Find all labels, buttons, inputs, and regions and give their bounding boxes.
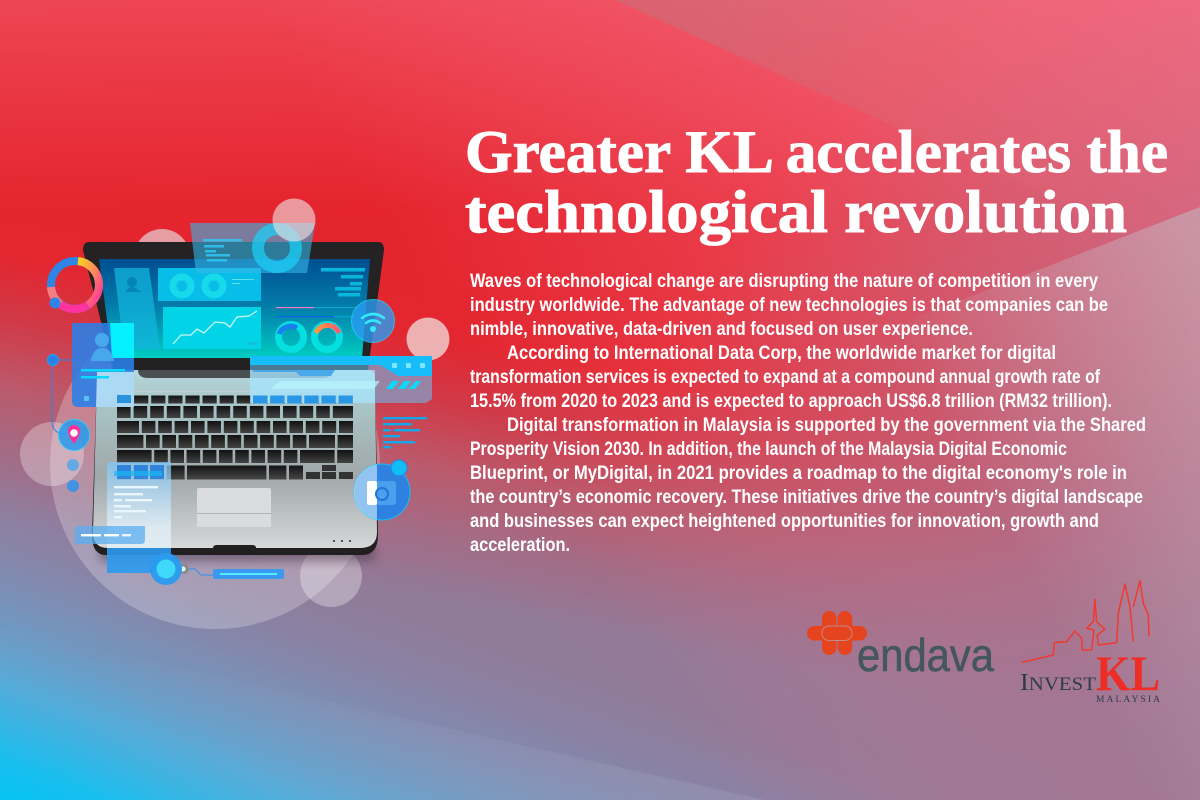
body text: According to International Data Corp, the worldwide market for digital bbox=[507, 343, 1056, 364]
status dots bbox=[333, 540, 351, 542]
title: Greater KL accelerates the bbox=[465, 119, 1168, 185]
left profile panel bbox=[72, 323, 134, 407]
translucent bubble bbox=[272, 198, 316, 242]
progress bar card bbox=[75, 526, 145, 544]
body text: 15.5% from 2020 to 2023 and is expected to approach US$6.8 trillion (RM32 trillion). bbox=[470, 391, 1112, 412]
body text: Prosperity Vision 2030. In addition, the launch of the Malaysia Digital Economic bbox=[470, 439, 1067, 460]
logo: InvestKL Malaysia: INVEST bbox=[1020, 670, 1096, 696]
top floating panel with ring bbox=[190, 223, 315, 273]
laptop base bbox=[92, 370, 378, 555]
logo: InvestKL Malaysia: KL bbox=[1096, 645, 1160, 701]
logo: endava bbox=[807, 611, 994, 681]
illustration: laptop with floating data panels bbox=[20, 198, 450, 629]
laptop hinge bbox=[113, 358, 362, 375]
screen dashboard bbox=[114, 268, 365, 350]
body text: and businesses can expect heightened opportunities for innovation, growth and bbox=[470, 511, 1099, 532]
touchpad bbox=[197, 488, 271, 527]
right status panel bbox=[250, 356, 432, 403]
body text bbox=[470, 271, 1146, 556]
body text: industry worldwide. The advantage of new technologies is that companies can be bbox=[470, 295, 1108, 316]
title: technological revolution bbox=[465, 179, 1127, 245]
keyboard bbox=[117, 400, 353, 479]
logo: InvestKL Malaysia bbox=[1020, 581, 1160, 705]
body text: Blueprint, or MyDigital, in 2021 provides a roadmap to the digital economy's role in bbox=[470, 463, 1127, 484]
location connector and pin bbox=[48, 354, 90, 492]
body text: nimble, innovative, data-driven and focused on user experience. bbox=[470, 319, 973, 340]
donut chart bbox=[50, 261, 99, 309]
backdrop circles bbox=[20, 229, 450, 629]
bottom node and bar bbox=[150, 553, 284, 585]
camera bubble bbox=[354, 460, 410, 520]
logo: endava: endava bbox=[857, 629, 994, 681]
laptop shadow bbox=[100, 545, 375, 561]
code lines right bbox=[383, 417, 427, 448]
logo: InvestKL Malaysia: MALAYSIA bbox=[1096, 695, 1160, 705]
title bbox=[465, 119, 1168, 245]
wifi bubble bbox=[352, 300, 394, 342]
body text: acceleration. bbox=[470, 535, 570, 556]
body text: Waves of technological change are disrupting the nature of competition in every bbox=[470, 271, 1098, 292]
laptop lid bbox=[83, 242, 384, 370]
lower left info panel bbox=[107, 462, 171, 573]
